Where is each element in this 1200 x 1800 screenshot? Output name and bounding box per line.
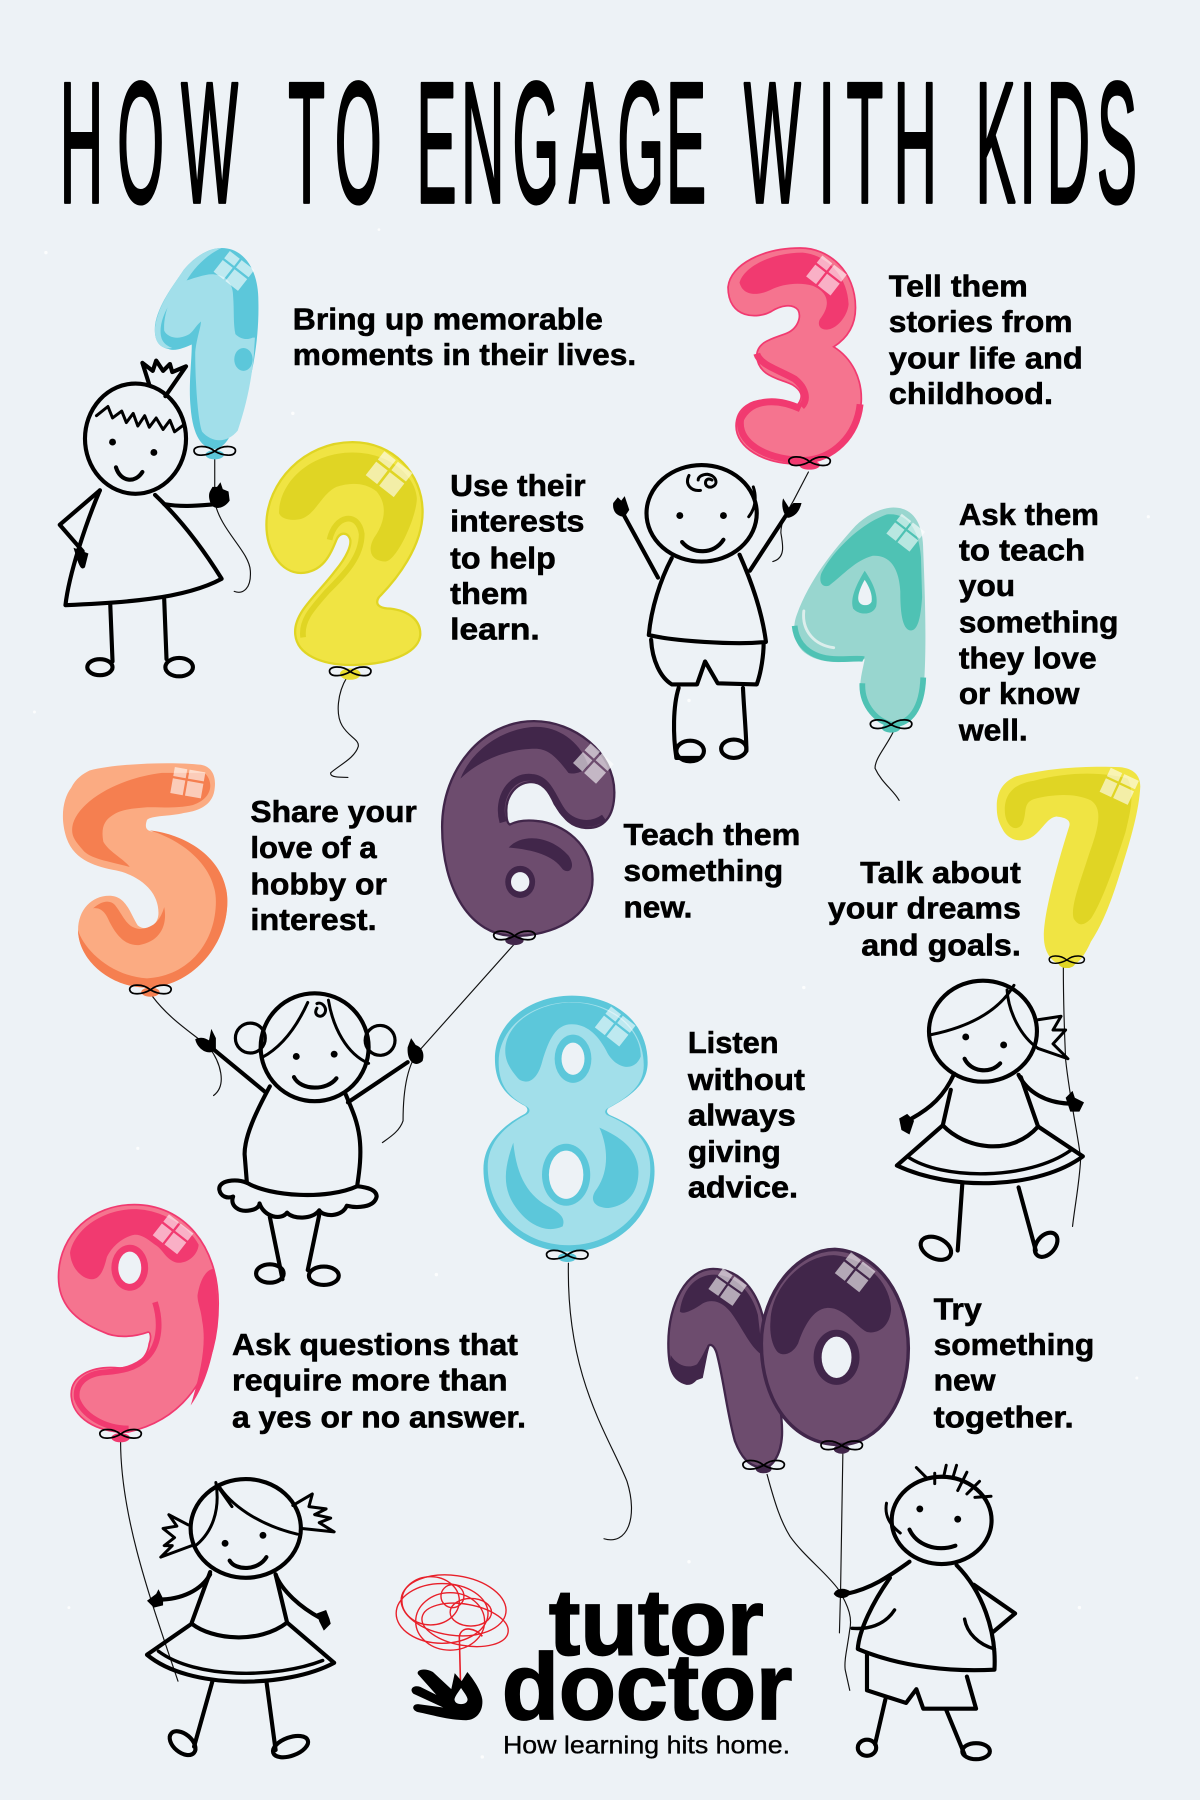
logo: tutor doctor [396,1568,792,1759]
text: tip 3: childhood. [889,376,1053,411]
text: tip 9 [232,1327,526,1434]
child 4: girl with ponytail and skirt [897,981,1084,1264]
title: ENGAGE [416,47,706,239]
text: tip 4 [958,497,1118,748]
text: tip 3: stories from [889,304,1073,339]
text: tip 9: a yes or no answer. [232,1399,526,1434]
text: tip 3 [889,268,1083,411]
text: tip 4: or know [959,676,1080,711]
child 5: girl with pigtails [147,1479,334,1762]
text: tip 8: advice. [688,1170,798,1205]
text: tip 10: new [934,1363,997,1398]
text: tip 7: Talk about [860,855,1021,890]
text: tip 8: Listen [688,1025,779,1060]
text: tip 3: Tell them [889,268,1028,303]
text: tip 8: without [687,1062,805,1097]
text: tip 5: Share your [250,794,417,829]
balloon number 3 [728,248,861,470]
title: TO [288,47,382,239]
text: tip 6 [624,817,800,925]
text: tip 4: you [959,568,1015,603]
text: tip 10: Try [934,1291,983,1326]
text: tip 7: your dreams [828,891,1021,926]
text: tip 7 [828,855,1021,962]
text: tip 1 [293,302,636,372]
text: tip 6: new. [624,890,692,925]
logo: tutor doctor: How learning hits home. [503,1731,790,1759]
balloon number 1 [155,248,258,459]
text: tip 10: together. [934,1399,1074,1434]
title [60,47,1137,239]
logo icon: hand holding drop [412,1669,482,1720]
child 1: girl with crown [60,361,230,676]
logo: tutor doctor: doctor [502,1634,792,1739]
balloon number 9 [59,1205,218,1442]
text: tip 9: require more than [232,1363,508,1398]
balloon number 2 [266,442,423,680]
text: tip 4: Ask them [959,497,1099,532]
title: HOW [60,47,238,239]
text: tip 5 [250,794,417,937]
text: tip 4: well. [958,713,1028,748]
text: tip 8: always [688,1097,796,1132]
text: tip 6: Teach them [624,817,800,852]
balloon number 10 [668,1249,908,1473]
logo: tutor doctor: tutor [549,1570,764,1675]
title: WITH [744,47,937,239]
text: tip 10 [934,1291,1094,1434]
balloon strings [121,457,1081,1690]
text: tip 2: Use their [450,468,586,503]
text: tip 5: interest. [250,902,377,937]
text: tip 4: something [959,605,1118,640]
text: tip 4: to teach [959,532,1085,567]
text: tip 8 [687,1025,805,1205]
text: tip 2: them [450,576,528,611]
title: KIDS [975,47,1137,239]
child 2: baby with raised arms [613,465,802,761]
logo icon: red scribble [396,1568,512,1682]
text: tip 4: they love [959,640,1097,675]
text: tip 3: your life and [889,341,1083,376]
text: tip 7: and goals. [861,927,1021,962]
text: tip 5: hobby or [250,867,387,902]
text: tip 10: something [934,1327,1094,1362]
text: tip 1: Bring up memorable [293,302,603,337]
text: tip 2: learn. [450,612,540,647]
text: tip 1: moments in their lives. [293,337,636,372]
balloon number 5 [63,763,227,997]
balloon number 7 [997,767,1140,968]
text: tip 2: interests [450,504,584,539]
balloon number 4 [794,508,925,733]
child 3: girl with hair buns [195,993,423,1285]
text: tip 8: giving [688,1134,781,1169]
text: tip 6: something [624,853,783,888]
balloon number 8 [483,996,655,1262]
balloon number 6 [442,721,614,945]
text: tip 9: Ask questions that [232,1327,518,1362]
text: tip 5: love of a [250,830,377,865]
text: tip 2 [450,468,586,647]
child 6: boy with spiky hair [834,1465,1015,1759]
text: tip 2: to help [450,540,556,575]
